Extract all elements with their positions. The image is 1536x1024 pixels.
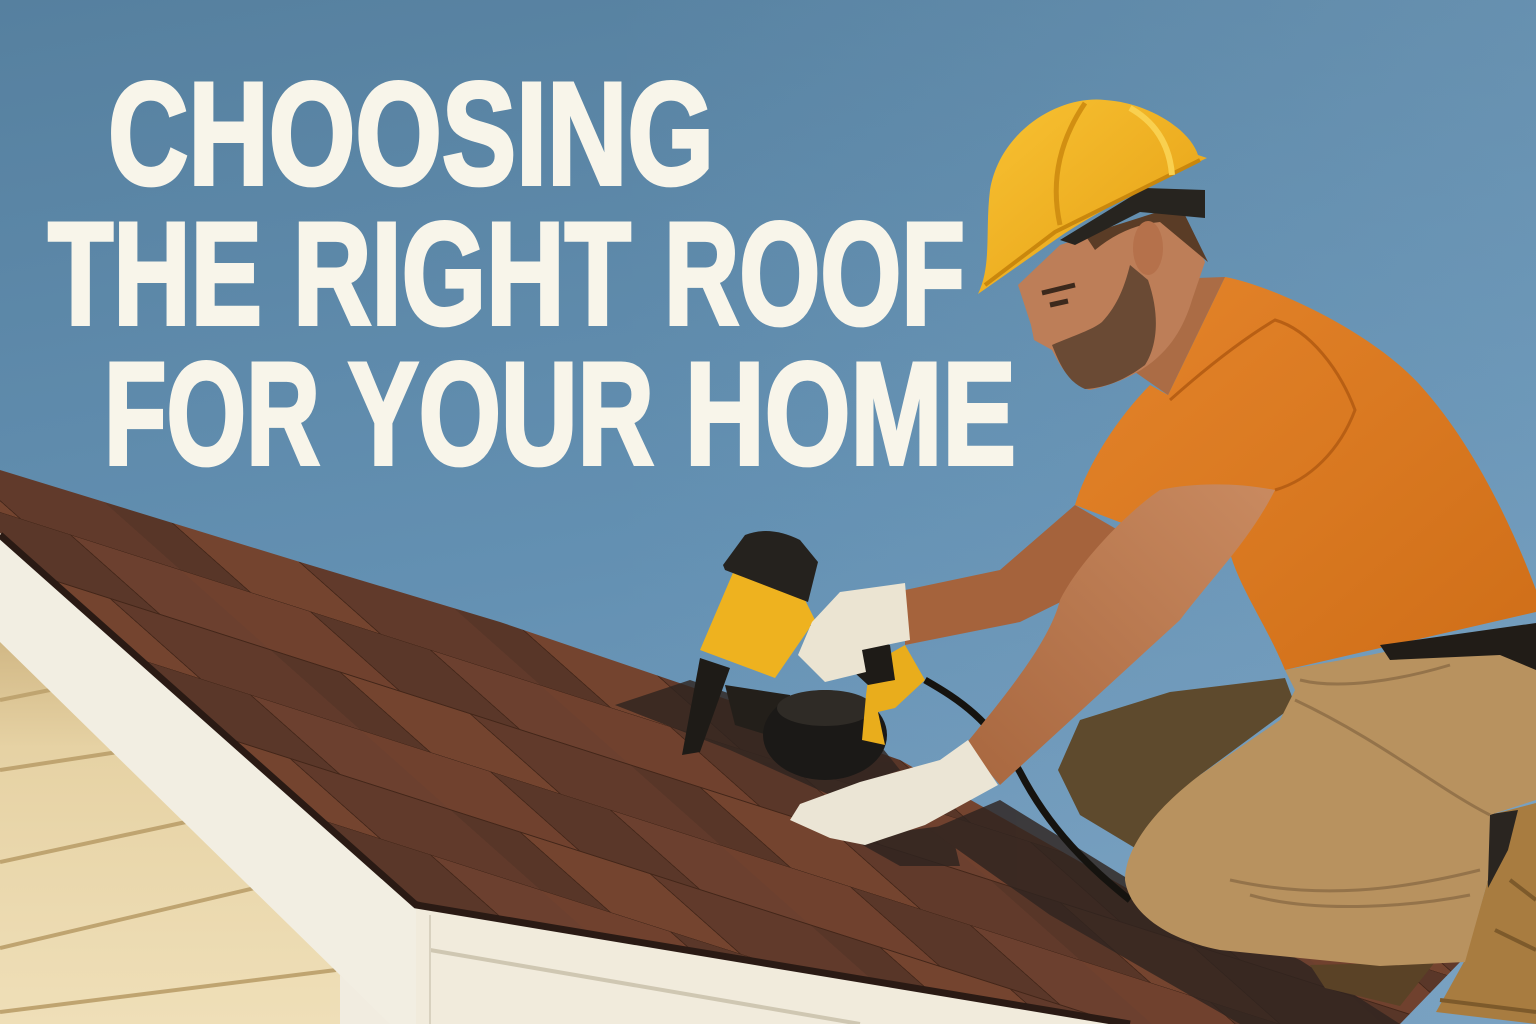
far arm [905,505,1135,645]
front boot [1436,803,1536,1024]
roof shadows [615,680,1400,1024]
roof shingles [0,470,1462,1024]
black cap [723,531,818,602]
far leg [1058,678,1295,848]
title line 2: RIGHT [293,192,631,355]
eye and brow [1042,285,1075,305]
yellow body [700,568,815,678]
title line 2: ROOF [664,192,965,355]
upper glove [798,583,910,682]
ear [1133,221,1163,275]
belt [1380,623,1536,670]
orange t-shirt [1075,277,1536,670]
roof edge line [0,535,1130,1024]
neck and head [1018,205,1225,395]
lower glove [790,740,998,845]
title line 3: FOR [104,332,320,495]
nail gun [682,531,925,780]
trousers [1125,628,1536,966]
air hose [925,680,1130,900]
title line 1: CHOOSING [108,52,714,215]
title line 2 [48,192,965,355]
title line 2: THE [48,192,262,355]
white rake board [0,530,430,1024]
rear boot [1310,962,1435,1006]
hair [1085,205,1208,262]
handle [810,625,925,745]
title [48,52,1016,495]
roofer [682,100,1536,1024]
title line 3: HOME [685,332,1016,495]
house gable [0,530,1140,1024]
title line 3 [104,332,1016,495]
beard [1052,265,1156,389]
siding wall [0,630,400,1024]
near arm [965,484,1275,785]
yellow helmet [978,100,1207,294]
white fascia wall [416,900,1140,1024]
helmet strap [1060,188,1205,245]
nail gun nose [682,658,730,755]
coil magazine [725,685,887,780]
title line 3: YOUR [348,332,654,495]
